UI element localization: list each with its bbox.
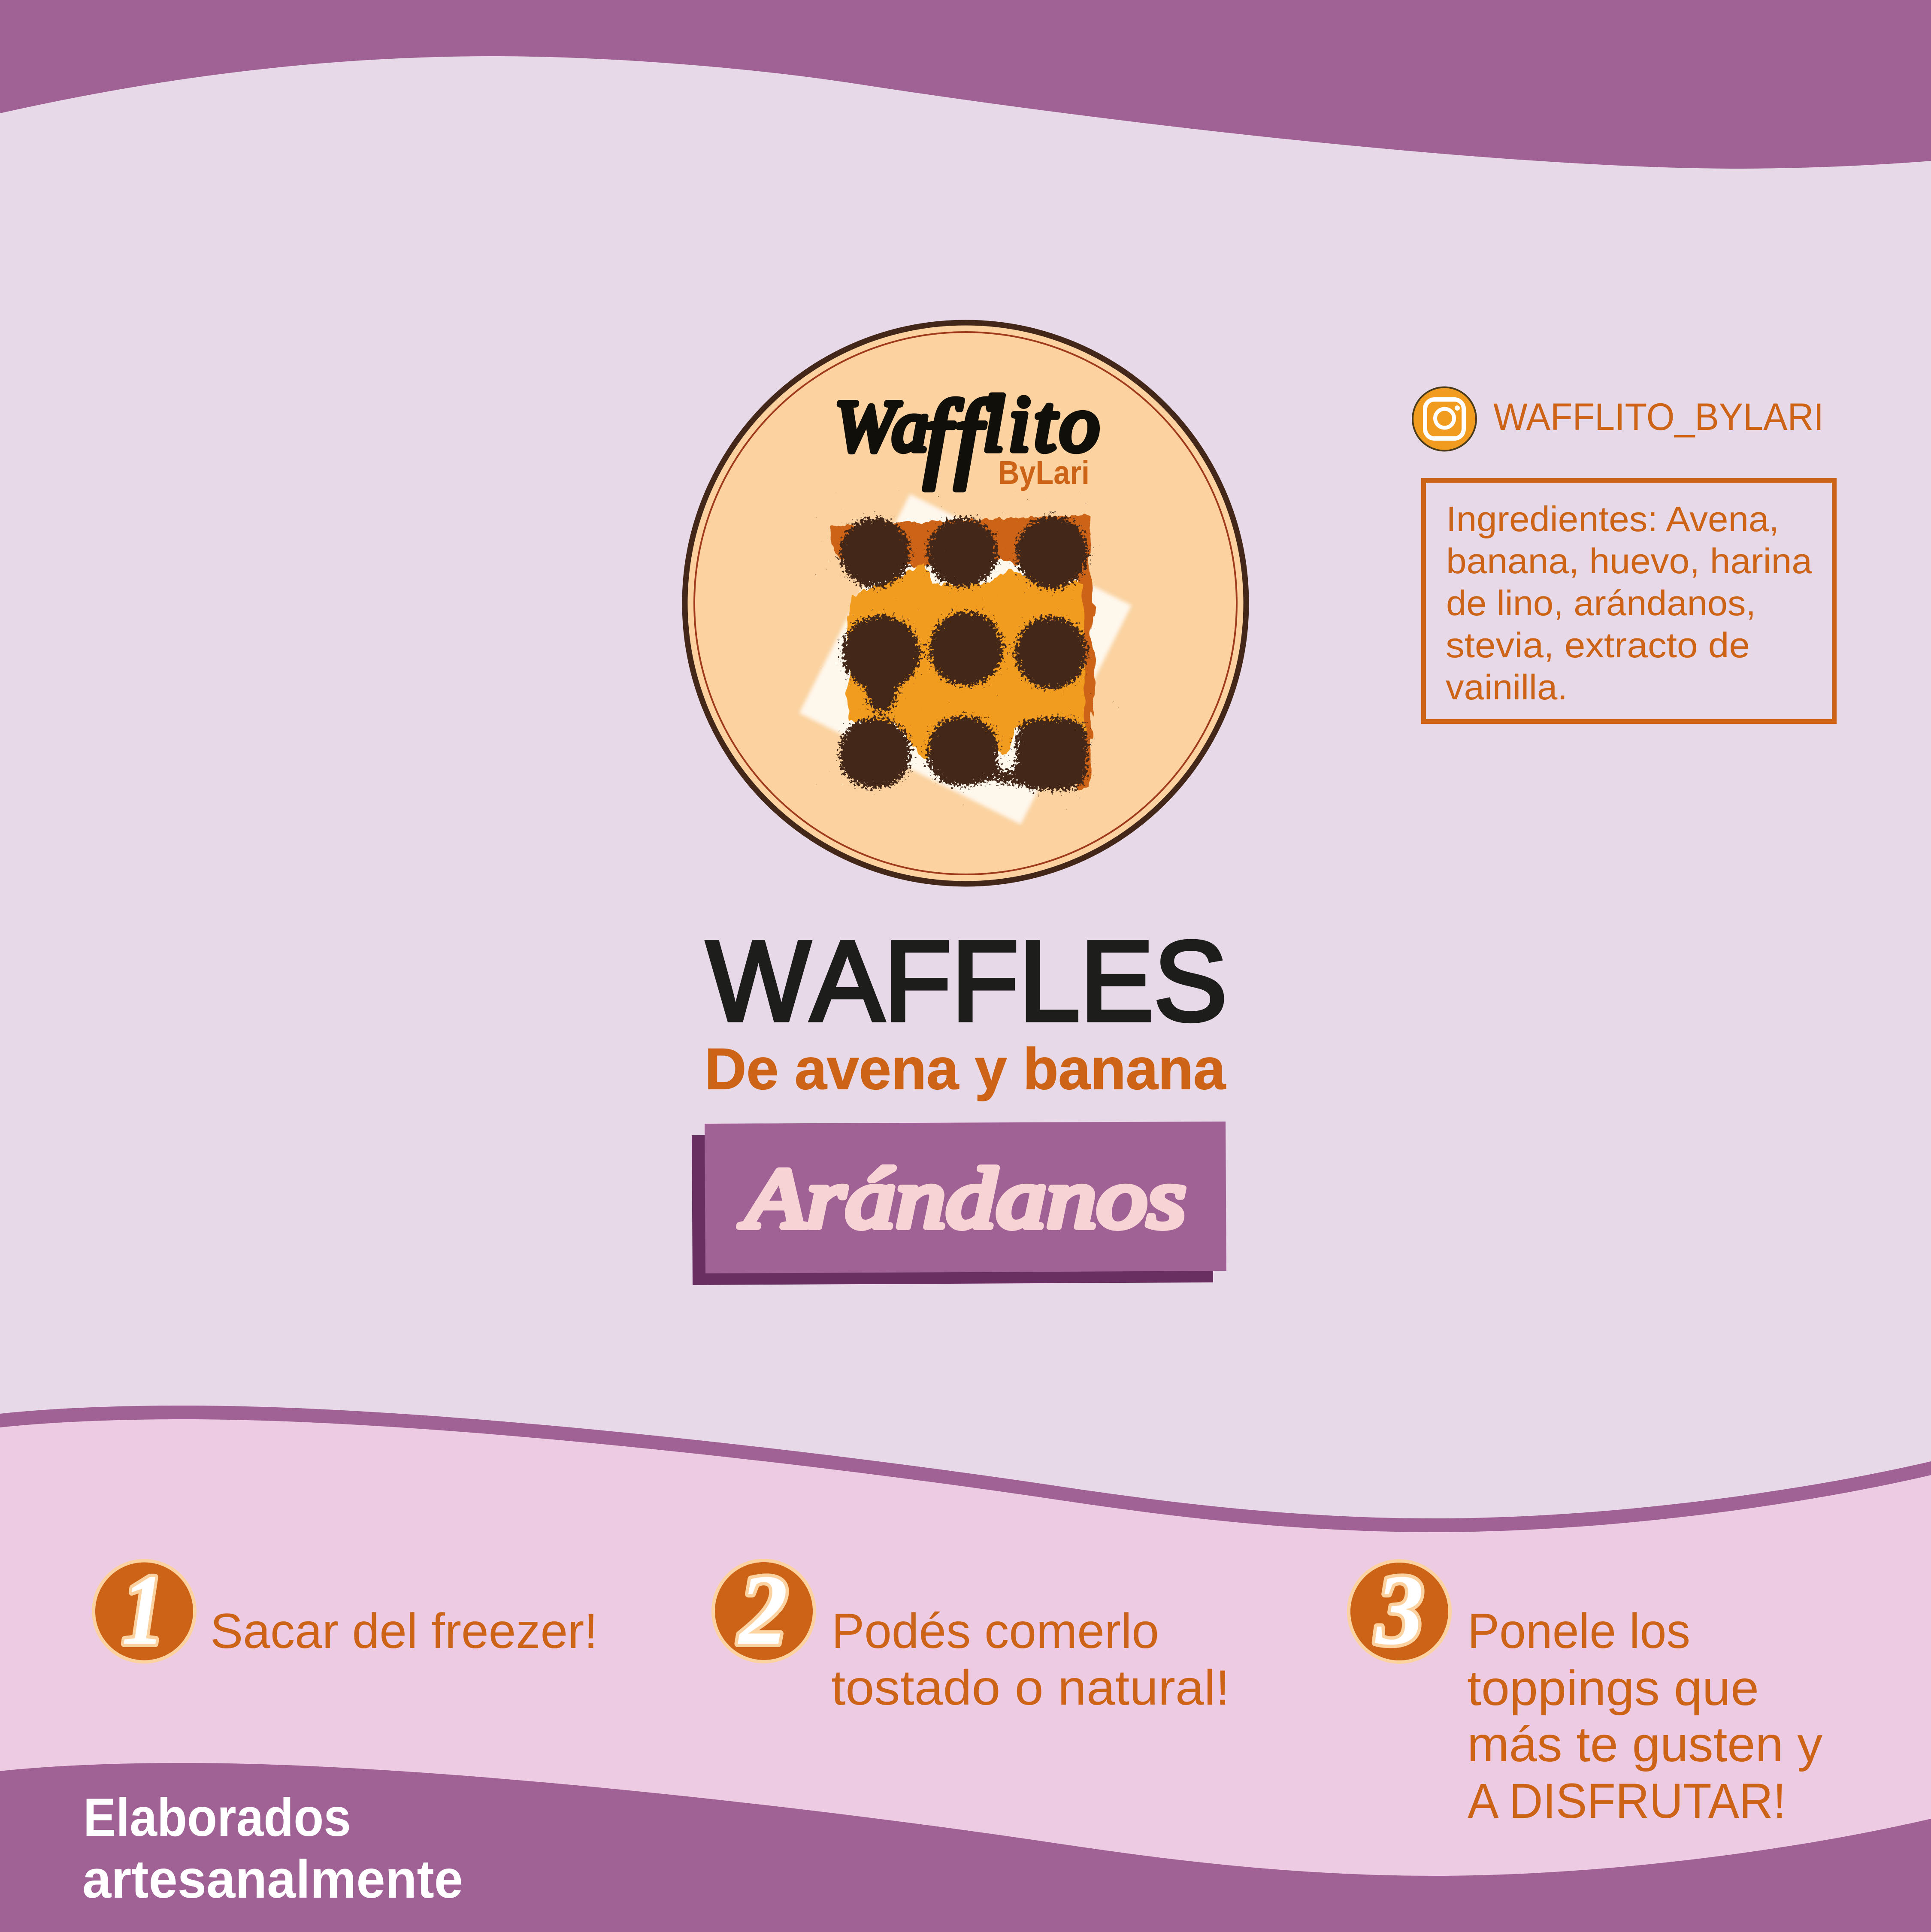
step 2 text xyxy=(831,1604,1230,1715)
footer text: Elaborados xyxy=(83,1788,351,1847)
step 2 badge xyxy=(713,1560,814,1662)
step 3 text: más te gusten y xyxy=(1467,1717,1823,1772)
flavour label xyxy=(692,1122,1226,1285)
ingredients text: stevia, extracto de xyxy=(1446,625,1750,665)
step 3 text: Ponele los xyxy=(1468,1604,1690,1659)
step 2 number: 2 xyxy=(738,1554,788,1666)
step 3 xyxy=(1349,1554,1823,1829)
subtitle: De avena y banana xyxy=(705,1036,1226,1101)
logo word: Wafflito: Wa xyxy=(835,386,926,466)
bottom purple wave xyxy=(0,1763,1931,1932)
ingredients box xyxy=(1424,481,1834,722)
instagram name: WAFFLITO_BYLARI xyxy=(1493,395,1824,438)
step 1 text: Sacar del freezer! xyxy=(210,1604,598,1659)
napkin xyxy=(799,494,1132,825)
logo word: Wafflito: ff xyxy=(923,381,993,490)
bottom pink band with purple edge xyxy=(0,1406,1931,1932)
box frame xyxy=(1424,481,1834,722)
badge inner ring xyxy=(694,332,1237,874)
label plate xyxy=(705,1122,1226,1273)
step 2 text: Podés comerlo xyxy=(832,1604,1159,1659)
logo word: ByLari: ByLari xyxy=(998,454,1090,491)
step 1 badge xyxy=(94,1561,195,1662)
instagram handle xyxy=(1413,387,1824,450)
title: WAFFLES xyxy=(706,918,1227,1045)
footer text: artesanalmente xyxy=(82,1850,463,1909)
ingredients text xyxy=(1446,499,1813,707)
waffle dark squares xyxy=(840,516,1088,790)
logo word: Wafflito: lito xyxy=(983,380,1103,468)
ingredients text: vainilla. xyxy=(1446,667,1568,707)
step 3 number: 3 xyxy=(1375,1554,1424,1666)
badge circle xyxy=(685,323,1246,884)
step 2 text: tostado o natural! xyxy=(831,1660,1230,1715)
label shadow xyxy=(692,1133,1213,1285)
ingredients text: banana, huevo, harina xyxy=(1446,541,1813,581)
logo badge xyxy=(685,323,1246,884)
step 3 text: A DISFRUTAR! xyxy=(1468,1774,1786,1829)
waffle amber body xyxy=(848,562,1085,759)
top purple wave xyxy=(0,0,1931,169)
footer text xyxy=(82,1788,463,1909)
ingredients text: de lino, arándanos, xyxy=(1446,583,1756,623)
step 3 text: toppings que xyxy=(1467,1661,1759,1716)
icon: instagram xyxy=(1413,387,1476,450)
step 1 xyxy=(94,1554,598,1666)
ingredients text: Ingredientes: Avena, xyxy=(1446,499,1779,539)
flavour text: Arándanos xyxy=(739,1151,1186,1246)
step 3 badge xyxy=(1349,1561,1450,1662)
waffle illustration xyxy=(799,494,1132,825)
step 2 xyxy=(713,1554,1230,1715)
step 1 number: 1 xyxy=(122,1554,165,1666)
waffle orange base xyxy=(830,515,1096,789)
step 3 text xyxy=(1467,1604,1823,1829)
